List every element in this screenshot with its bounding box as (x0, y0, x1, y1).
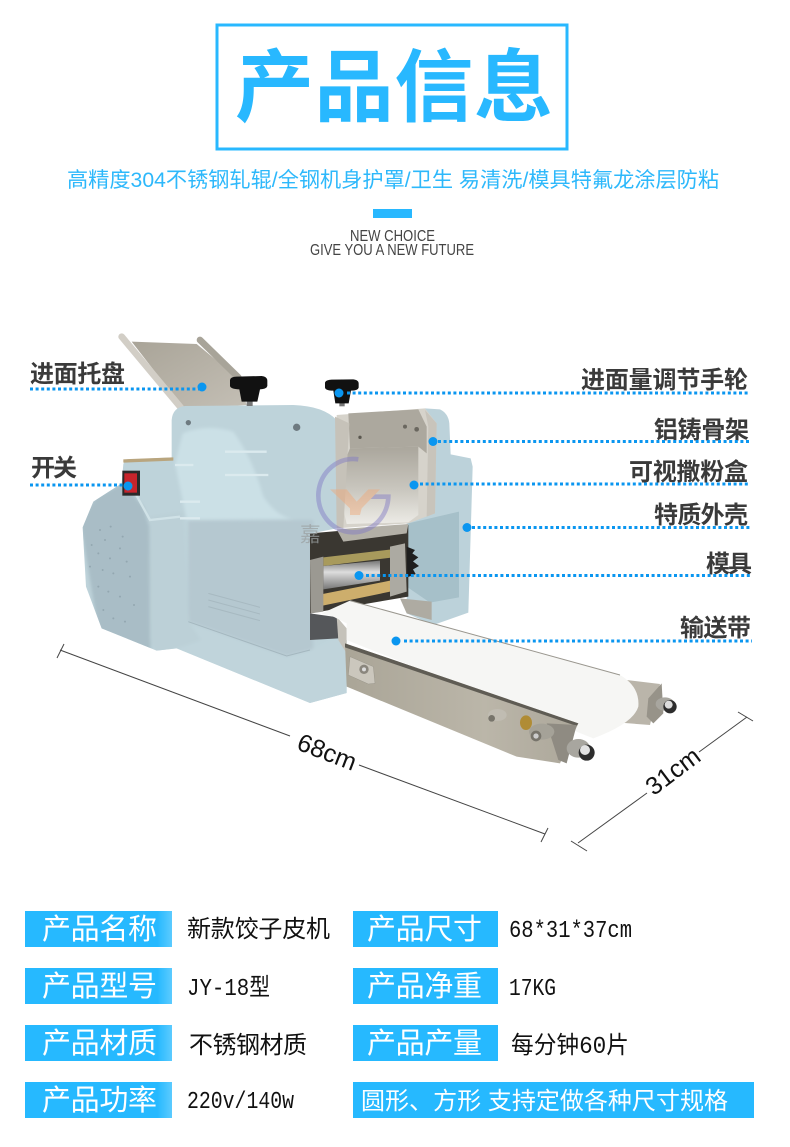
callout: 输送带: 输送带 (680, 615, 751, 642)
callout: 输送带 (392, 615, 752, 646)
housing shading (80, 428, 350, 705)
spec: 产品净重 (353, 968, 556, 1004)
spec: 产品产量: 每分钟60片 (511, 1032, 629, 1061)
feed tray (122, 337, 247, 408)
spec: 产品功率 (25, 1082, 294, 1118)
callout: 可视撒粉盒: 可视撒粉盒 (629, 458, 748, 486)
side plate (345, 643, 595, 763)
spec: 产品尺寸: 产品尺寸 (367, 913, 482, 946)
spec: 产品产量 (353, 1025, 629, 1061)
machine body (80, 337, 473, 705)
belt surface (322, 601, 638, 738)
callout: 铝铸骨架: 铝铸骨架 (654, 417, 749, 444)
speaker dots (89, 526, 135, 623)
machine illustration (80, 337, 677, 763)
callout: 模具 (354, 551, 752, 580)
spec: 产品名称: 新款饺子皮机 (187, 916, 330, 945)
subtitle: 高精度304不锈钢轧辊/全钢机身护罩/卫生 易清洗/模具特氟龙涂层防粘 (67, 169, 719, 192)
callout: 特质外壳: 特质外壳 (654, 502, 748, 529)
far bracket (620, 680, 677, 725)
callout: 铝铸骨架 (428, 417, 750, 446)
spec: 产品功率: 220v/140w (187, 1089, 294, 1116)
spec: 产品型号: JY-18型 (187, 974, 270, 1003)
screw holes (186, 420, 191, 425)
inner cavity (407, 512, 459, 603)
right shell (407, 408, 473, 625)
spec: 产品型号 (25, 968, 270, 1004)
spec: 产品尺寸 (353, 911, 632, 947)
housing (83, 405, 347, 703)
callout: 开关: 开关 (31, 455, 77, 482)
title box (217, 25, 567, 149)
spec: 产品净重: 17KG (509, 976, 556, 1003)
callout: 进面量调节手轮: 进面量调节手轮 (581, 367, 748, 394)
slogan: NEW CHOICE (350, 228, 435, 245)
dimension: 31cm: 31cm (640, 742, 706, 801)
slogan (310, 228, 474, 259)
accent bar (373, 209, 412, 218)
spec: 产品尺寸: 68*31*37cm (509, 918, 632, 945)
roller assembly (310, 524, 432, 620)
dimension: 68cm: 68cm (293, 729, 360, 777)
nameplate text lines (208, 593, 260, 621)
spec table (25, 911, 754, 1118)
power switch (122, 471, 140, 496)
callout: 进面量调节手轮 (334, 367, 750, 398)
corner post (310, 613, 347, 653)
machine body: 嘉 (300, 524, 321, 547)
conveyor belt (322, 601, 677, 763)
slogan: GIVE YOU A NEW FUTURE (310, 242, 474, 259)
spec: 产品名称: 产品名称 (42, 913, 157, 946)
spec: 产品材质 (25, 1025, 307, 1061)
spec: shapes note (353, 1082, 754, 1118)
spec: 产品型号: 产品型号 (42, 970, 157, 1003)
watermark logo (318, 459, 388, 532)
callout: 进面托盘: 进面托盘 (30, 361, 125, 388)
callout: 可视撒粉盒 (410, 458, 750, 490)
spec: 产品净重: 产品净重 (367, 970, 482, 1003)
spec: 产品材质: 不锈钢材质 (189, 1032, 307, 1061)
spec: 产品材质: 产品材质 (42, 1027, 157, 1060)
spec: 产品名称 (25, 911, 330, 947)
callout: 特质外壳 (462, 502, 750, 532)
callout: 开关 (30, 455, 132, 490)
callout: 进面托盘 (30, 361, 206, 392)
dimension: 31cm (571, 712, 753, 851)
title box: 产品信息 (235, 43, 553, 132)
spec: shapes note: 圆形、方形 支持定做各种尺寸规格 (361, 1088, 728, 1115)
spec: 产品功率: 产品功率 (42, 1084, 157, 1117)
knobs (230, 376, 359, 406)
callout: 模具: 模具 (706, 551, 752, 578)
spec: 产品产量: 产品产量 (367, 1027, 482, 1060)
metal side frame (335, 408, 437, 528)
dimension: 68cm (57, 644, 548, 842)
